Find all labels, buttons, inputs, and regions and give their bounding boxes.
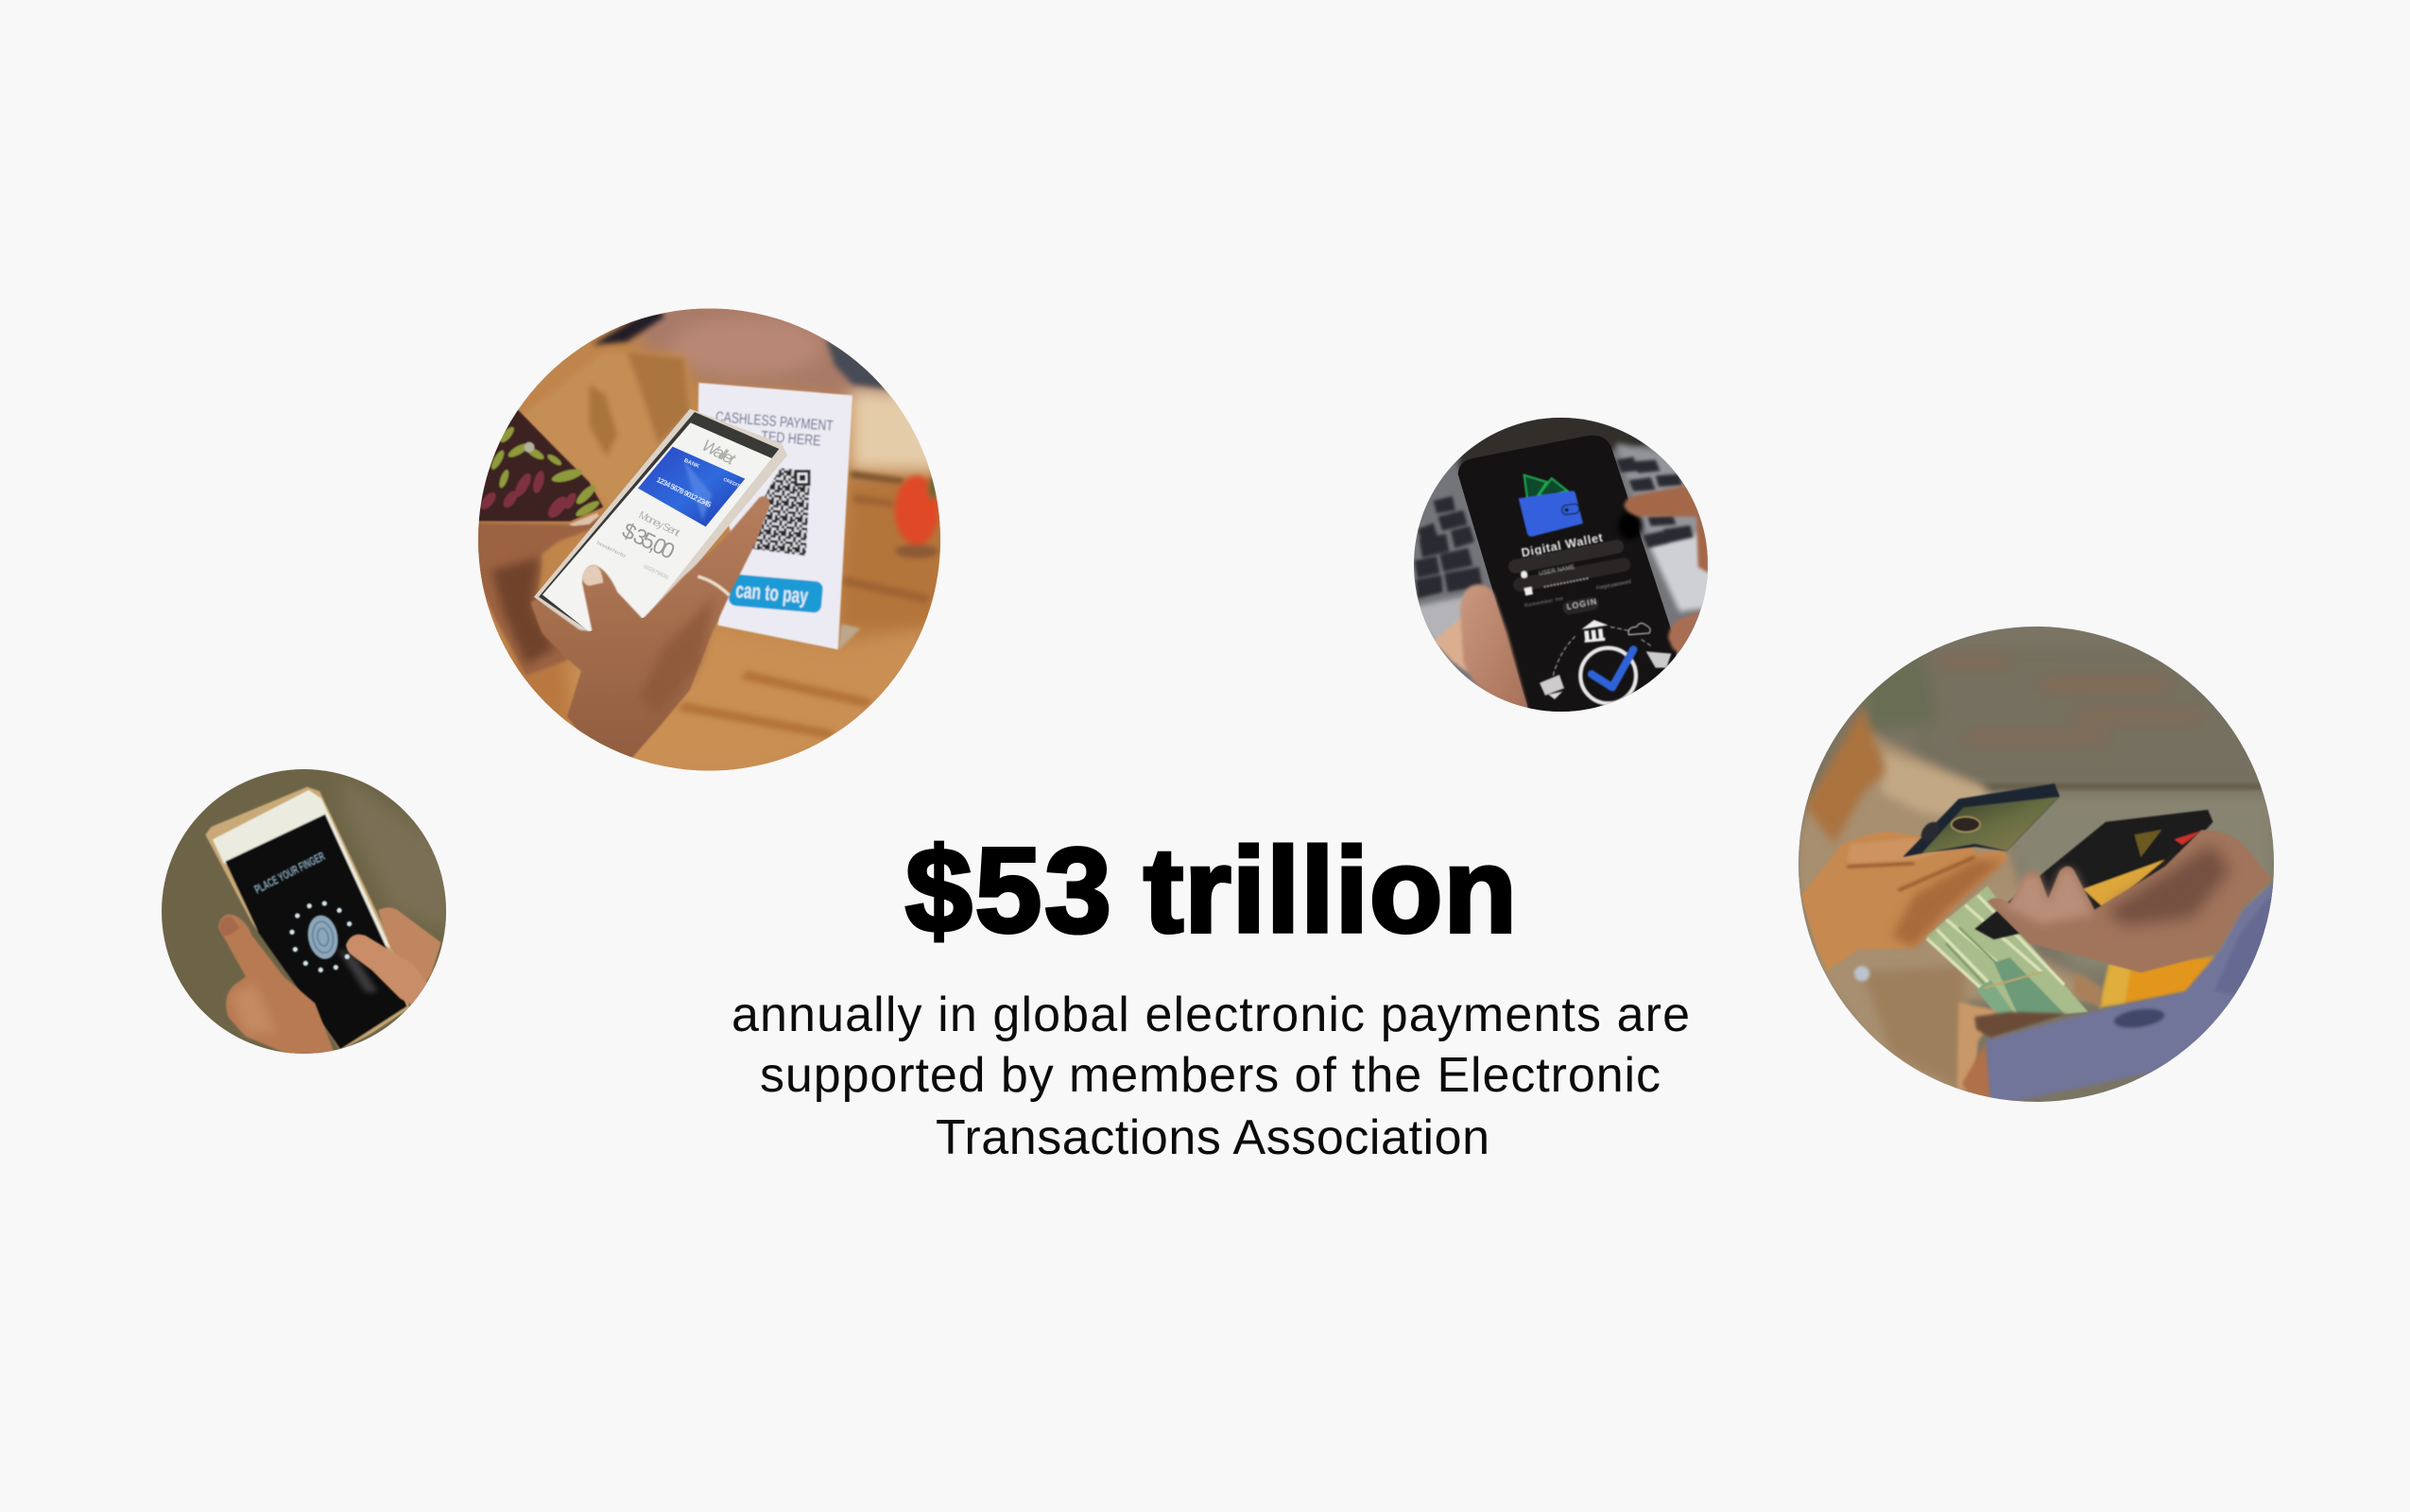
username field text: USER NAME <box>1539 563 1575 577</box>
left smartphone <box>1902 783 2059 857</box>
description line 2: supported by members of the Electronic <box>760 1048 1661 1103</box>
photo: digital wallet login screen <box>1414 418 1708 712</box>
remember me text: Remember me <box>1524 596 1564 610</box>
amount value: $ 35,00 <box>618 518 679 564</box>
login form <box>1507 539 1631 615</box>
flower bouquet <box>466 409 603 522</box>
payment card <box>638 447 745 526</box>
orange melon <box>2099 956 2218 1007</box>
smartphone with wallet app <box>534 409 787 641</box>
laptop keyboard keys <box>1415 456 1694 598</box>
forgot password text: Forgot password <box>1596 579 1631 592</box>
transaction label: Transaction Number <box>594 540 627 559</box>
cash icon <box>1540 675 1564 696</box>
photo: two people paying with phones at a market <box>1786 614 2287 1115</box>
left thumb and hand <box>218 915 334 1056</box>
thumb <box>1434 584 1528 709</box>
beige shirt <box>1796 707 2099 1107</box>
blue sleeve <box>1986 881 2275 1107</box>
headline figure: $53 <box>905 823 1150 957</box>
headline figure: trillion <box>1144 823 1518 957</box>
login button text: LOGIN <box>1566 596 1597 611</box>
left hand <box>1801 832 2007 971</box>
card type label: CREDIT <box>722 477 741 490</box>
description line 1: annually in global electronic payments are <box>732 988 1690 1042</box>
cloud icon <box>1628 624 1650 635</box>
scan to pay button: can to pay <box>734 577 809 609</box>
front hand holding phone <box>531 496 770 778</box>
sign text: CASHLESS PAYMENT <box>714 409 835 435</box>
description text block <box>732 988 1690 1165</box>
fingers <box>1624 485 1709 655</box>
sign text second line: TED HERE <box>761 429 821 450</box>
transaction number: 002979835 <box>643 564 669 581</box>
fingerprint <box>304 913 341 961</box>
back hand <box>473 513 599 676</box>
right hand behind phone <box>378 907 441 989</box>
table wood streaks <box>678 471 929 739</box>
finger reflection on screen <box>337 948 378 992</box>
phone body <box>1458 436 1678 713</box>
paper flower wrap <box>520 352 695 510</box>
right index finger <box>346 935 427 1006</box>
scan dots <box>289 901 352 972</box>
card bank label: BANK <box>683 458 700 470</box>
asparagus bundle <box>1925 885 2088 1019</box>
card number: 1234 5678 9012 2345 <box>655 475 713 509</box>
scan to pay button <box>728 574 823 613</box>
digital wallet heading: Digital Wallet <box>1521 531 1605 559</box>
shirt button <box>1854 966 1869 981</box>
right smartphone <box>1974 810 2213 939</box>
phone body <box>205 787 409 1051</box>
lower hand <box>1962 1012 2067 1100</box>
amount label: Money Sent <box>637 509 682 540</box>
sign stand base <box>838 624 861 650</box>
password field text: ************** <box>1543 576 1590 593</box>
screen prompt: PLACE YOUR FINGER <box>252 849 327 897</box>
QR payment sign <box>697 383 852 649</box>
right hand <box>1988 830 2272 972</box>
wooden crate <box>1957 972 2101 1091</box>
red flower <box>895 475 938 558</box>
ring <box>697 576 730 595</box>
QR code <box>749 468 810 556</box>
wallet icon <box>1519 475 1583 537</box>
payment icons ring <box>1540 620 1671 703</box>
bank icon <box>1581 620 1609 643</box>
wallet label: Wallet <box>699 436 740 469</box>
photo: paying by phone at a QR code sign <box>478 308 940 771</box>
photo: fingerprint authentication on a phone <box>151 756 454 1058</box>
description line 3: Transactions Association <box>936 1110 1489 1165</box>
check mark badge <box>1580 648 1636 703</box>
cart icon <box>1646 651 1671 668</box>
